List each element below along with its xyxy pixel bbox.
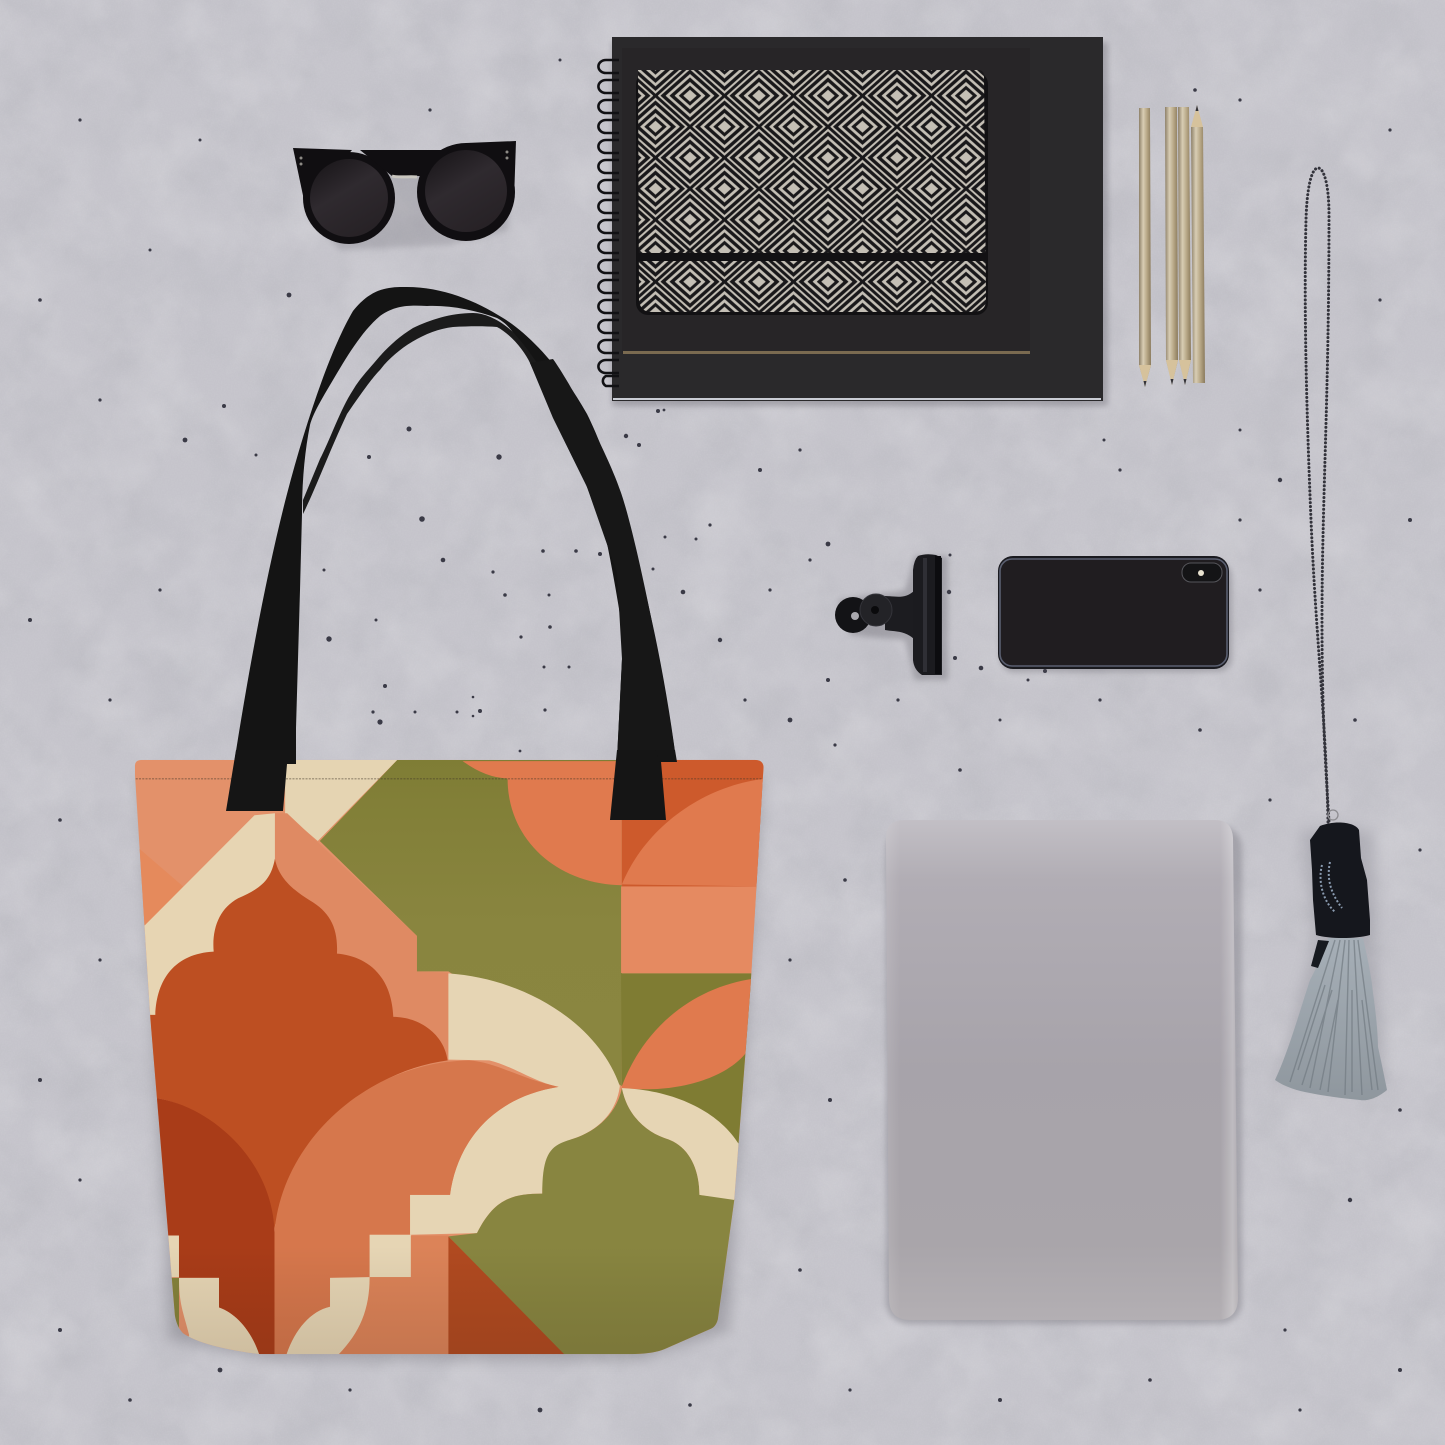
sunglasses [293, 141, 516, 250]
bead highlights [1321, 862, 1342, 912]
laptop shadow [886, 826, 1242, 1324]
tote bag [130, 287, 770, 1370]
bag body with geometric print [130, 750, 770, 1370]
ring [1328, 810, 1338, 820]
bulldog clip [835, 554, 948, 680]
bead necklace chain [1305, 168, 1329, 822]
left lens [310, 159, 388, 237]
hinge studs [300, 150, 508, 166]
medium notebook [622, 48, 1030, 354]
right lens [425, 150, 507, 232]
beaded head [1310, 823, 1370, 938]
front disc [860, 594, 892, 626]
stitching [136, 778, 763, 780]
tassel shadow [1275, 830, 1385, 1085]
clip shadow [838, 556, 948, 680]
strap: second handle [303, 313, 666, 818]
notebooks shadow [612, 42, 1108, 406]
frame [293, 141, 516, 244]
barrel [913, 554, 942, 675]
gold pencils [1139, 105, 1205, 387]
smartphone [998, 556, 1232, 672]
back disc [835, 597, 871, 633]
pencil 3 [1178, 107, 1191, 385]
laptop [886, 820, 1242, 1324]
bag shadow [140, 775, 762, 1360]
tassel loop [1311, 940, 1329, 968]
spiral binding [598, 60, 619, 386]
strap overlap on right side [530, 359, 676, 759]
pencil 2 [1165, 107, 1178, 385]
thread strands [1290, 940, 1378, 1095]
pencil 4 [1191, 105, 1205, 383]
stem [885, 590, 915, 640]
large black notebook [612, 37, 1103, 401]
strap: first handle [227, 287, 676, 811]
camera module [1182, 563, 1222, 582]
phone body [998, 556, 1229, 669]
metal bridge [392, 176, 417, 177]
pencil 1 [1139, 108, 1151, 387]
patterned fabric notebook [636, 70, 988, 315]
laptop lid [886, 820, 1238, 1320]
book edge [613, 398, 1101, 400]
thread skirt [1275, 938, 1387, 1100]
glasses shadow [305, 160, 510, 250]
straps [227, 287, 676, 818]
beaded tassel [1275, 810, 1387, 1100]
stacked notebooks [598, 37, 1108, 406]
phone shadow [1000, 562, 1232, 672]
strap tabs stitched on bag [226, 750, 677, 820]
